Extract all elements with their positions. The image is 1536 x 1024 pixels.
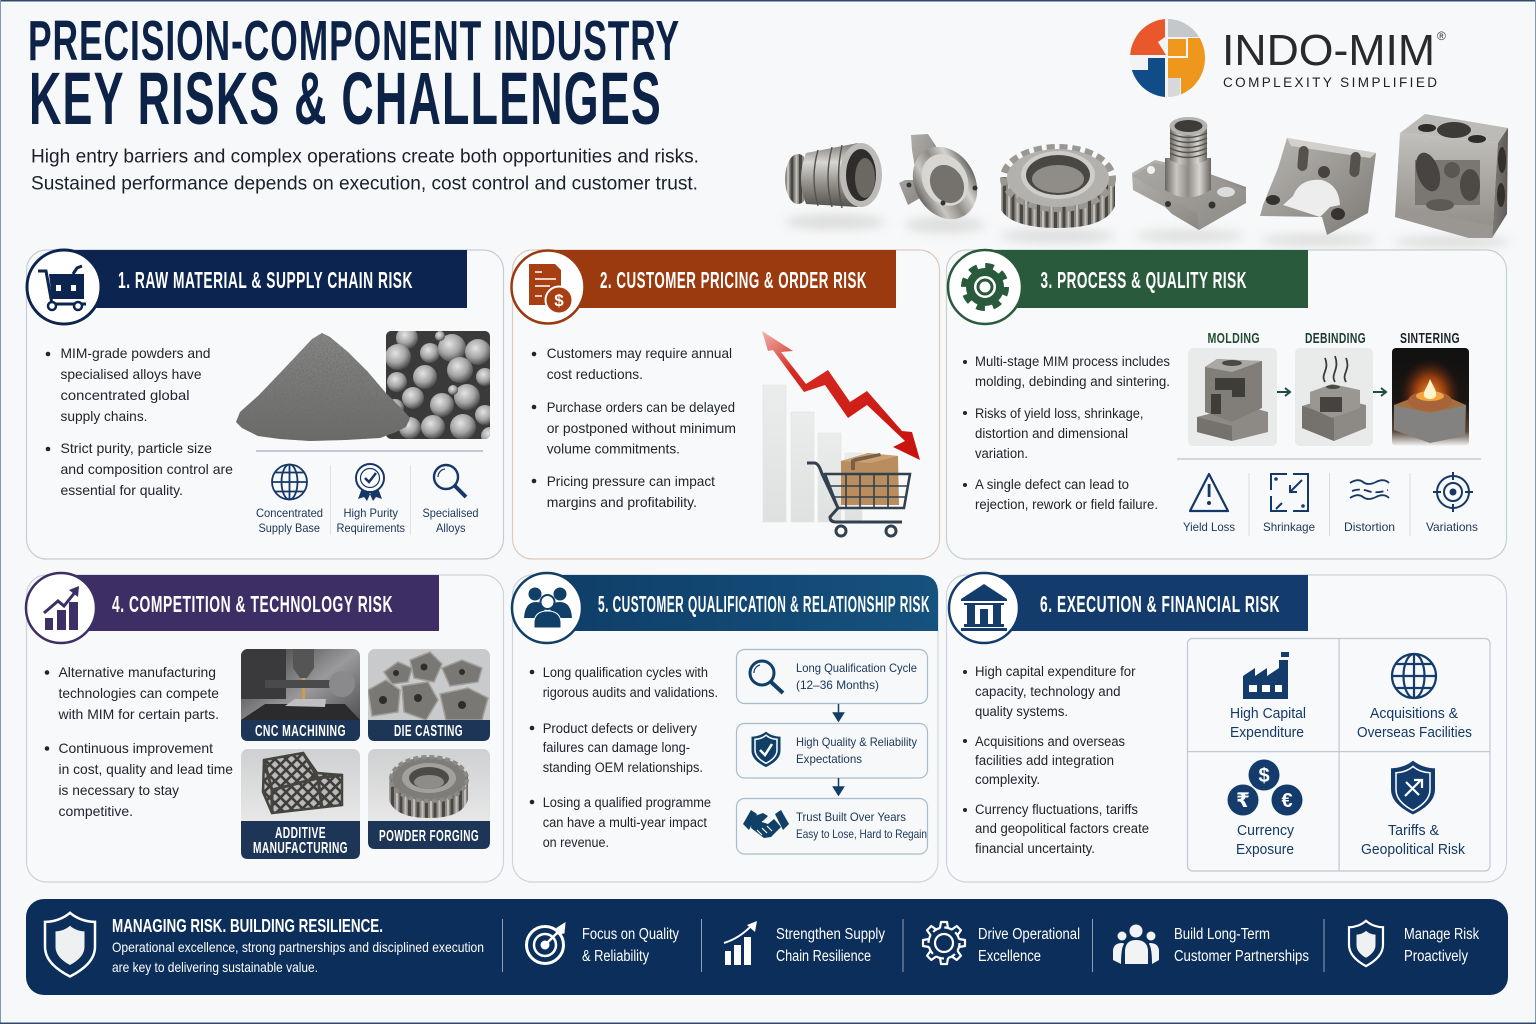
part 3: spur gear	[1001, 148, 1115, 228]
bullets 1: concentrated global	[60, 387, 190, 403]
tile: powder forging	[368, 749, 490, 849]
bullets 2: Pricing pressure can impact	[547, 473, 715, 489]
bullets 4: Alternative manufacturing	[58, 664, 216, 680]
image: metal powder spheres	[386, 331, 490, 439]
panel 1: raw material and supply chain risk	[26, 250, 504, 559]
callout: trust built over years: Easy to Lose, Hard to Regain	[796, 827, 927, 841]
label: tariffs and geopolitical risk	[1361, 823, 1466, 858]
shadow reflections	[785, 214, 1510, 248]
icon: factory	[1243, 652, 1289, 699]
shopping cart	[807, 463, 910, 536]
icon: white people	[1113, 924, 1159, 964]
bullets 6: Acquisitions and overseas	[975, 734, 1125, 749]
bullets 4: technologies can compete	[58, 685, 219, 701]
tile: additive manufacturing: MANUFACTURING	[253, 840, 348, 857]
label: high capital expenditure	[1230, 706, 1306, 741]
bullets 6: complexity.	[975, 772, 1040, 787]
image: powder pile	[236, 333, 410, 441]
icon: invoice with dollar	[512, 250, 584, 324]
bullets 6	[963, 664, 1149, 856]
bullets 3: Multi-stage MIM process includes	[975, 354, 1170, 369]
label: variations: Variations	[1426, 520, 1478, 534]
icon: warning triangle	[1190, 474, 1228, 511]
bullets 6: and geopolitical factors create	[975, 821, 1149, 836]
step: molding: MOLDING	[1208, 330, 1260, 347]
bullets 2: or postponed without minimum	[547, 420, 736, 436]
arrow	[1373, 388, 1386, 396]
label: distortion: Distortion	[1344, 520, 1395, 534]
bullets 3: distortion and dimensional	[975, 426, 1128, 441]
callout: trust built over years: Trust Built Over Years	[796, 810, 906, 824]
logo: INDO-MIM: ®	[1437, 29, 1446, 43]
step: debinding	[1295, 330, 1373, 446]
label: shrinkage: Shrinkage	[1263, 520, 1315, 534]
callout: long qualification cycle: (12–36 Months)	[796, 678, 879, 692]
bullets 4: Continuous improvement	[58, 740, 213, 756]
item: build customer partnerships: Customer Partnerships	[1174, 948, 1309, 965]
bullets 6: financial uncertainty.	[975, 841, 1095, 856]
icon: magnifier	[434, 465, 466, 497]
bullets 2: margins and profitability.	[547, 494, 697, 510]
arrow	[834, 778, 844, 795]
item: drive operational excellence: Excellence	[978, 948, 1041, 965]
footer heading and message: MANAGING RISK. BUILDING RESILIENCE.	[112, 916, 383, 936]
panel 6: execution and financial risk	[946, 573, 1506, 882]
item: manage risk proactively	[1404, 926, 1479, 965]
tile: powder forging: POWDER FORGING	[379, 828, 479, 845]
bullets 2: Customers may require annual	[547, 345, 732, 361]
header bar 4	[60, 575, 439, 631]
panel 4: competition and technology risk	[26, 573, 504, 882]
bullets 5: failures can damage long-	[543, 740, 690, 755]
header bar 1	[60, 250, 467, 308]
item: strengthen supply chain: Chain Resilience	[776, 948, 871, 965]
cardboard box	[841, 453, 899, 505]
tile: additive manufacturing: ADDITIVE	[275, 825, 326, 842]
callout: trust built over years	[736, 798, 928, 854]
bullets 5	[530, 665, 718, 850]
icon: globe	[272, 464, 307, 500]
bullets 4: with MIM for certain parts.	[58, 706, 219, 722]
bullets 3: A single defect can lead to	[975, 477, 1129, 492]
label: high capital expenditure: High Capital	[1230, 706, 1306, 722]
header bar 6	[984, 575, 1308, 631]
label: currency exposure: Currency	[1237, 823, 1295, 839]
header bar 3	[985, 250, 1308, 308]
step: debinding: DEBINDING	[1305, 330, 1366, 347]
tile: die casting: DIE CASTING	[394, 723, 463, 740]
icon: currency coins	[1228, 760, 1302, 816]
tile: additive manufacturing	[241, 749, 360, 859]
bullets 2	[532, 345, 736, 510]
bullets 2: volume commitments.	[547, 440, 680, 456]
label: high purity requirements: Requirements	[336, 521, 405, 535]
item: manage risk proactively: Proactively	[1404, 948, 1468, 965]
footer banner: managing risk	[26, 899, 1508, 995]
header bar 5	[548, 575, 938, 631]
bullets 4: competitive.	[58, 803, 133, 819]
label: high capital expenditure: Expenditure	[1230, 725, 1304, 741]
heading 2: 2. CUSTOMER PRICING & ORDER RISK	[600, 267, 867, 293]
panel 5: customer qualification and relationship risk	[512, 573, 938, 882]
logo: INDO-MIM	[1130, 19, 1446, 97]
header bar 2	[548, 250, 896, 308]
icon: people	[512, 573, 582, 643]
bullets 1: specialised alloys have	[60, 366, 202, 382]
item: drive operational excellence: Drive Operational	[978, 926, 1080, 943]
bullets 4: is necessary to stay	[58, 782, 179, 798]
logo: INDO-MIM: INDO-MIM	[1222, 27, 1435, 75]
divider 1	[256, 450, 483, 452]
bullets 3	[963, 354, 1170, 512]
callout: high quality expectations	[736, 724, 928, 778]
item: manage risk proactively: Manage Risk	[1404, 926, 1479, 943]
footer heading and message: Operational excellence, strong partnerships and disciplined execution	[112, 939, 484, 955]
label: concentrated supply base: Concentrated	[256, 506, 323, 520]
bullets 5: Product defects or delivery	[543, 721, 697, 736]
bullets 5: standing OEM relationships.	[543, 760, 703, 775]
icon: growth chart	[26, 573, 96, 643]
icon: currency coins: $	[1258, 765, 1270, 787]
item: strengthen supply chain	[776, 926, 885, 965]
bullets 5: Losing a qualified programme	[543, 795, 711, 810]
icon: target	[1433, 472, 1473, 512]
label: acquisitions and overseas facilities: Acquisitions &	[1370, 706, 1458, 722]
icon: purity rosette	[356, 464, 384, 501]
subtitle	[31, 146, 699, 194]
bullets 3: variation.	[975, 446, 1028, 461]
icon: currency coins: €	[1281, 790, 1293, 812]
bullets 4	[45, 664, 233, 819]
title: KEY RISKS & CHALLENGES	[29, 57, 662, 140]
footer heading and message	[112, 916, 484, 975]
bullets 6: Currency fluctuations, tariffs	[975, 802, 1138, 817]
bullets 6: quality systems.	[975, 704, 1068, 719]
callout: high quality expectations: Expectations	[796, 752, 862, 766]
logo: INDO-MIM: COMPLEXITY SIMPLIFIED	[1223, 75, 1437, 90]
label: concentrated supply base	[256, 506, 323, 535]
bullets 1: and composition control are	[60, 461, 233, 477]
part 5: L bracket	[1260, 138, 1376, 235]
item: focus on quality: & Reliability	[582, 948, 649, 965]
title	[28, 9, 680, 140]
icon: distortion waves	[1350, 480, 1389, 499]
icon: shopping cart	[27, 250, 101, 324]
item: drive operational excellence	[978, 926, 1080, 965]
icon: invoice with dollar: $	[554, 291, 564, 310]
callout: long qualification cycle: Long Qualification Cycle	[796, 661, 917, 675]
part 4: threaded flange	[1132, 117, 1246, 230]
arrow	[834, 704, 844, 721]
bullets 5: rigorous audits and validations.	[543, 685, 718, 700]
heading 1: 1. RAW MATERIAL & SUPPLY CHAIN RISK	[118, 267, 413, 293]
label: specialised alloys: Alloys	[436, 521, 466, 535]
callout: high quality expectations: High Quality & Reliability	[796, 735, 917, 749]
divider 3	[1177, 458, 1481, 460]
icon: institution building	[949, 573, 1019, 643]
label: high purity requirements: High Purity	[344, 506, 398, 520]
metal parts row	[785, 114, 1510, 248]
declining bars	[763, 385, 862, 522]
step: molding	[1188, 330, 1277, 446]
label: tariffs and geopolitical risk: Geopolitical Risk	[1361, 842, 1466, 858]
icon: large shield	[45, 913, 95, 976]
label: concentrated supply base: Supply Base	[258, 521, 320, 535]
item: strengthen supply chain: Strengthen Supply	[776, 926, 885, 943]
item: build customer partnerships	[1174, 926, 1309, 965]
panel 2: customer pricing and order risk	[512, 250, 940, 559]
bullets 6: High capital expenditure for	[975, 664, 1136, 679]
step: sintering	[1392, 330, 1469, 446]
panel 3: process and quality risk	[946, 250, 1506, 559]
subtitle: Sustained performance depends on execution, cost control and customer trust.	[31, 172, 698, 194]
footer heading and message: are key to delivering sustainable value.	[112, 959, 318, 975]
bullets 3: Risks of yield loss, shrinkage,	[975, 406, 1144, 421]
bullets 2: Purchase orders can be delayed	[547, 399, 735, 415]
arrow	[1277, 388, 1290, 396]
bullets 1: MIM-grade powders and	[60, 345, 210, 361]
icon: currency coins: ₹	[1236, 788, 1250, 812]
item: focus on quality	[582, 926, 679, 965]
bullets 5: can have a multi-year impact	[543, 815, 707, 830]
step: sintering: SINTERING	[1400, 330, 1460, 347]
label: acquisitions and overseas facilities	[1357, 706, 1472, 741]
label: acquisitions and overseas facilities: Overseas Facilities	[1357, 725, 1472, 741]
icon: gear	[948, 250, 1022, 324]
bullets 6: capacity, technology and	[975, 684, 1120, 699]
label: specialised alloys	[422, 506, 478, 535]
item: focus on quality: Focus on Quality	[582, 926, 679, 943]
part 6: machined block	[1395, 114, 1508, 238]
bullets 6: facilities add integration	[975, 753, 1114, 768]
grid: financial exposure factors	[1188, 638, 1490, 871]
icon: shrinkage	[1271, 474, 1308, 511]
red zigzag arrow	[762, 331, 920, 460]
heading 5: 5. CUSTOMER QUALIFICATION & RELATIONSHIP RISK	[598, 591, 930, 617]
callout: long qualification cycle	[736, 650, 928, 704]
bullets 1: essential for quality.	[60, 482, 183, 498]
title: PRECISION-COMPONENT INDUSTRY	[28, 9, 680, 72]
tile: CNC machining: CNC MACHINING	[255, 723, 346, 740]
label: yield loss: Yield Loss	[1183, 520, 1235, 534]
label: specialised alloys: Specialised	[422, 506, 478, 520]
heading 4: 4. COMPETITION & TECHNOLOGY RISK	[112, 591, 393, 617]
bullets 5: Long qualification cycles with	[543, 665, 708, 680]
chart: falling bars with red arrow and cart	[762, 331, 920, 536]
subtitle: High entry barriers and complex operations create both opportunities and risks.	[31, 146, 699, 168]
bullets 5: on revenue.	[543, 835, 609, 850]
part 1: threaded cylinder	[785, 143, 882, 208]
label: currency exposure	[1236, 823, 1295, 858]
icon: globe large	[1392, 654, 1436, 698]
label: tariffs and geopolitical risk: Tariffs &	[1388, 823, 1439, 839]
bullets 1	[46, 345, 233, 498]
bullets 3: molding, debinding and sintering.	[975, 374, 1170, 389]
process flow: molding, debinding, sintering	[1188, 330, 1469, 446]
label: currency exposure: Exposure	[1236, 842, 1294, 858]
bullets 2: cost reductions.	[547, 366, 643, 382]
tile: die casting	[368, 649, 490, 741]
icon: rising bars	[724, 921, 757, 965]
bullets 3: rejection, rework or field failure.	[975, 497, 1158, 512]
icon: target with arrow	[526, 923, 565, 964]
bullets 1: supply chains.	[60, 408, 148, 424]
heading 6: 6. EXECUTION & FINANCIAL RISK	[1040, 591, 1280, 617]
icon: tariff shield	[1391, 761, 1435, 814]
item: build customer partnerships: Build Long-Term	[1174, 926, 1270, 943]
bullets 4: in cost, quality and lead time	[58, 761, 233, 777]
tile: CNC machining	[241, 649, 360, 741]
bullets 1: Strict purity, particle size	[60, 440, 212, 456]
icon: proactive shield	[1349, 921, 1383, 966]
heading 3: 3. PROCESS & QUALITY RISK	[1040, 267, 1247, 293]
part 2: clamp bracket	[899, 134, 990, 231]
label: high purity requirements	[336, 506, 405, 535]
icon: outline gear	[923, 922, 965, 964]
